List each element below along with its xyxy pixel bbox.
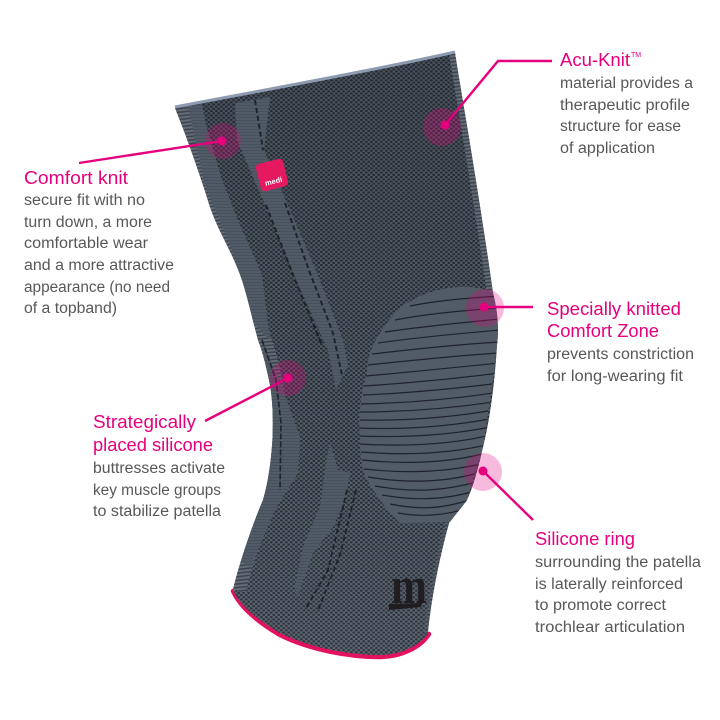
lower central band	[295, 443, 350, 597]
description: secure fit with no	[24, 192, 145, 209]
top rim	[175, 52, 455, 107]
pink bottom hem	[233, 591, 429, 657]
marker halo	[205, 123, 241, 159]
description: is laterally reinforced	[535, 576, 683, 593]
description: comfortable wear	[24, 235, 148, 252]
comfort zone	[359, 286, 498, 523]
description	[535, 554, 701, 636]
description	[24, 192, 174, 317]
callout: silicone ring	[464, 453, 701, 636]
heading: placed silicone	[93, 435, 213, 455]
description: buttresses activate	[93, 460, 225, 477]
medi tag	[255, 158, 289, 192]
upper left strip	[188, 104, 270, 340]
description: surrounding the patella	[535, 554, 701, 571]
marker halo	[270, 360, 306, 396]
description: therapeutic profile	[560, 97, 690, 114]
ribbed left edge	[175, 108, 273, 590]
marker halo	[466, 289, 504, 327]
description: prevents constriction	[547, 346, 694, 363]
description	[93, 460, 225, 520]
marker dot	[218, 136, 226, 146]
leader line	[205, 378, 288, 421]
leader line	[79, 141, 222, 163]
leader line	[484, 306, 533, 308]
comfort zone stripes	[359, 296, 500, 515]
description: key muscle groups	[93, 482, 221, 499]
heading	[547, 299, 681, 341]
sleeve details	[170, 50, 505, 660]
description: appearance (no need	[24, 279, 170, 296]
heading: Acu-Knit	[560, 50, 630, 70]
description: to promote correct	[535, 597, 667, 614]
side stitching	[262, 340, 281, 490]
main upper band	[235, 97, 348, 390]
description: and a more attractive	[24, 257, 174, 274]
medi tag: medi	[264, 175, 283, 188]
marker halo	[423, 108, 461, 146]
description: structure for ease	[560, 118, 681, 135]
marker dot	[478, 466, 488, 476]
description: material provides a	[560, 75, 693, 92]
lower band stitching	[305, 490, 356, 610]
trademark: TM	[631, 52, 641, 59]
description: turn down, a more	[24, 214, 152, 231]
marker dot	[284, 374, 292, 382]
knee support sleeve	[170, 50, 505, 660]
description: trochlear articulation	[535, 619, 685, 636]
heading	[93, 412, 213, 455]
marker dot	[480, 302, 488, 312]
callout: comfort zone	[466, 289, 694, 385]
leader line	[445, 61, 552, 125]
heading: Strategically	[93, 412, 196, 432]
ribbed right edge	[455, 53, 493, 293]
marker halo	[464, 453, 502, 491]
leader line	[483, 471, 533, 520]
description: for long-wearing fit	[547, 368, 684, 385]
sleeve body	[175, 53, 498, 655]
description	[547, 346, 694, 385]
description: of application	[560, 140, 655, 157]
marker dot	[440, 120, 450, 130]
heading: Silicone ring	[535, 529, 635, 549]
heading: Comfort Zone	[547, 321, 659, 341]
description: of a topband)	[24, 300, 117, 317]
heading: Specially knitted	[547, 299, 681, 319]
lower left panel	[240, 340, 300, 568]
heading: Comfort knit	[24, 168, 128, 188]
description: to stabilize patella	[93, 503, 221, 520]
ribbed bottom-right edge	[428, 500, 467, 633]
callout: strategically placed silicone	[93, 360, 306, 520]
callout: Acu-Knit	[423, 50, 693, 157]
callout: comfort knit	[24, 123, 241, 317]
band stitching	[255, 100, 342, 375]
m logo: m	[391, 558, 427, 615]
description	[560, 75, 693, 157]
